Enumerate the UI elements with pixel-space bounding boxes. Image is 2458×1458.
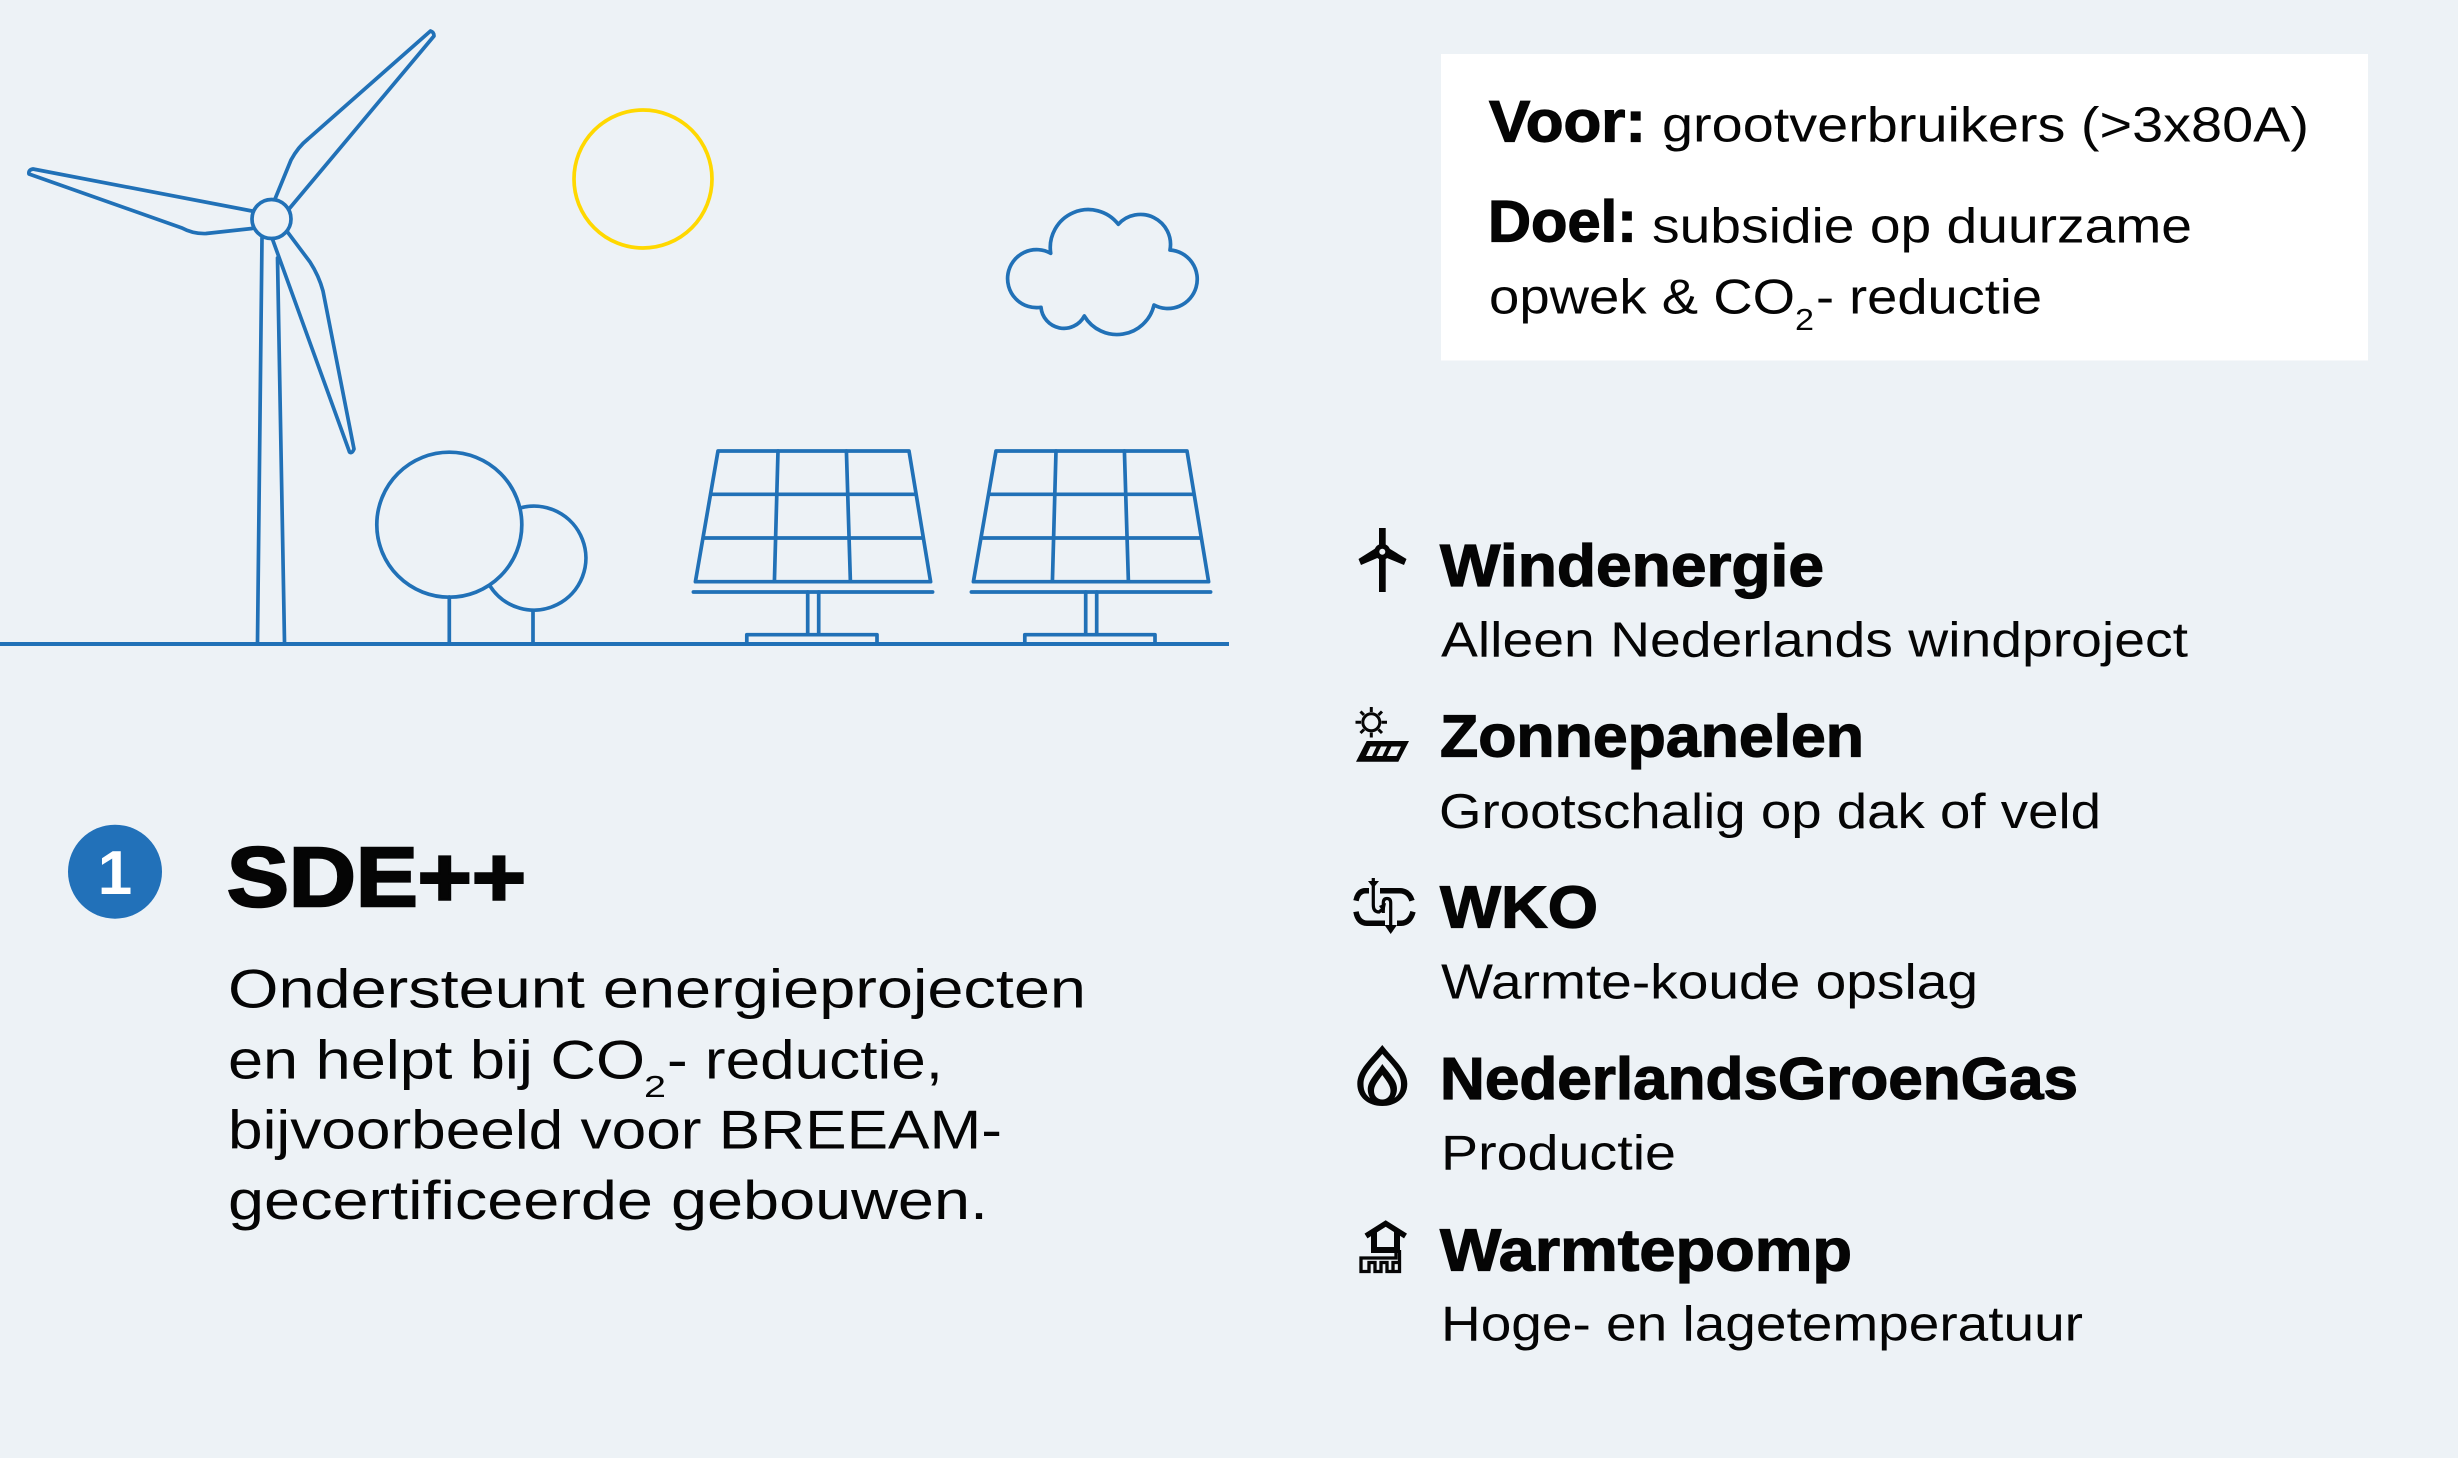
icon: wind turbine small	[1358, 528, 1406, 592]
icon: sun over solar panel	[1356, 707, 1409, 762]
text: voor: Voor:	[1489, 90, 1646, 155]
description: Productie	[1441, 1126, 1676, 1180]
text: doel	[1488, 190, 2192, 337]
text: doel: opwek & CO	[1489, 270, 1795, 324]
icon: solar panel left	[693, 451, 933, 642]
list item: Zonnepanelen	[1356, 704, 2101, 839]
icon: gas flame	[1357, 1045, 1407, 1106]
text: voor: grootverbruikers (>3x80A)	[1662, 99, 2309, 153]
heading: NederlandsGroenGas	[1440, 1046, 2078, 1112]
text: doel: - reductie	[1816, 270, 2042, 324]
section number badge	[68, 825, 162, 919]
icon: solar panel right	[971, 451, 1211, 642]
text: doel: Doel:	[1488, 190, 1637, 255]
text block: description: Ondersteunt energieprojecten	[228, 957, 1086, 1019]
text: doel: subsidie op duurzame	[1652, 200, 2192, 254]
text block: description: en helpt bij CO	[228, 1028, 645, 1090]
list item: Windenergie	[1358, 528, 2188, 668]
text block: description: gecertificeerde gebouwen.	[228, 1169, 988, 1231]
panel: target group and goal	[1441, 54, 2368, 360]
description: Hoge- en lagetemperatuur	[1441, 1298, 2083, 1352]
icon: heat-cold storage pipes	[1356, 878, 1413, 934]
description: Alleen Nederlands windproject	[1441, 614, 2188, 668]
text: voor	[1489, 90, 2309, 155]
text block: description	[228, 957, 1086, 1231]
text block: description: bijvoorbeeld voor BREEAM-	[228, 1098, 1002, 1160]
section number badge: 1	[98, 839, 132, 908]
heading: SDE++: SDE++	[227, 830, 526, 924]
text: doel: 2	[1795, 302, 1814, 337]
icon: house with underfloor heating	[1361, 1224, 1406, 1272]
icon: trees	[377, 452, 586, 642]
text block: description: - reductie,	[667, 1028, 943, 1090]
list item: NederlandsGroenGas	[1357, 1045, 2078, 1180]
icon: sun	[574, 110, 712, 248]
heading: Warmtepomp	[1440, 1218, 1852, 1284]
list item: Warmtepomp	[1361, 1218, 2083, 1352]
illustration: landscape with wind turbine, sun, cloud, trees and solar panels	[0, 31, 1229, 646]
heading: WKO	[1440, 874, 1598, 940]
icon: wind turbine	[29, 31, 434, 642]
ground line	[0, 642, 1229, 646]
heading: Windenergie	[1440, 533, 1824, 599]
list item: WKO	[1356, 874, 1978, 1010]
heading: Zonnepanelen	[1440, 704, 1864, 770]
icon: cloud	[1008, 210, 1197, 335]
description: Warmte-koude opslag	[1441, 956, 1978, 1010]
text block: description: 2	[644, 1069, 666, 1104]
description: Grootschalig op dak of veld	[1439, 785, 2101, 839]
